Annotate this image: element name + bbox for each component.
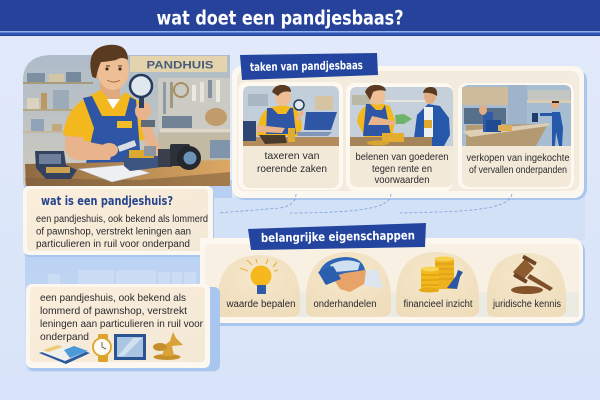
- label: roerende zaken: [257, 163, 327, 175]
- label: belenen van goederen: [356, 151, 449, 163]
- body text: [40, 293, 204, 343]
- shop background: [23, 55, 230, 185]
- icon: magnifying glass: [130, 75, 152, 108]
- icon: gavel: [511, 255, 553, 294]
- body text: een pandjeshuis, ook bekend als lommerd: [36, 214, 208, 225]
- body text: leningen aan particulieren in ruil voor: [40, 319, 204, 330]
- label: [356, 151, 449, 186]
- card: taxeren: [238, 82, 343, 190]
- body text: particulieren in ruil voor onderpand: [36, 239, 190, 250]
- connector panel: light blue band behind left text: [24, 180, 232, 372]
- body text: lommerd of pawnshop, verstrekt: [40, 306, 187, 317]
- icon: watch: [93, 334, 111, 362]
- heading badge: taken van pandjesbaas: [240, 53, 378, 80]
- heading badge: taken van pandjesbaas: taken van pandjesbaas: [250, 58, 363, 74]
- shelves and goods: [23, 72, 230, 163]
- illustration: pawnbroker at counter: [23, 45, 230, 186]
- jewellery box: [35, 151, 77, 179]
- card: verkopen: [458, 83, 574, 189]
- icon: light bulb: [240, 259, 278, 294]
- icon: coin stacks: [419, 256, 463, 292]
- item: juridische kennis: [487, 253, 566, 317]
- man: [63, 45, 161, 163]
- item: onderhandelen: [306, 252, 391, 317]
- sign: [130, 56, 227, 72]
- label: voorwaarden: [374, 174, 430, 186]
- icon: gold balance: [153, 332, 183, 360]
- card: belenen: [346, 83, 453, 191]
- body text: [36, 214, 208, 250]
- body text: onderpand: [40, 332, 89, 343]
- icon: tablet: [114, 334, 146, 360]
- item: onderhandelen: onderhandelen: [314, 299, 376, 310]
- title: wat doet een pandjesbaas?: [156, 6, 404, 30]
- item: juridische kennis: juridische kennis: [492, 299, 561, 310]
- body text: een pandjeshuis, ook bekend als: [40, 293, 186, 304]
- label: [257, 150, 327, 175]
- item: waarde bepalen: waarde bepalen: [226, 299, 296, 310]
- label: tegen rente en: [372, 163, 432, 175]
- dashed connectors: [218, 194, 512, 213]
- label: [466, 152, 570, 176]
- panel: wat is een pandjeshuis: [23, 186, 214, 257]
- label: verkopen van ingekochte: [466, 152, 570, 164]
- label: of vervallen onderpanden: [469, 164, 567, 176]
- icon: handshake: [318, 257, 383, 292]
- scene: taxeren: [243, 85, 339, 146]
- panel: taken van pandjesbaas: [232, 66, 587, 200]
- item: waarde bepalen: [218, 255, 300, 317]
- scene: belenen: [350, 85, 453, 146]
- scene: verkopen: [462, 85, 571, 146]
- heading badge: belangrijke eigenschappen: [248, 223, 426, 250]
- paper: [78, 165, 150, 182]
- item: financieel inzicht: [396, 252, 479, 317]
- counter: [25, 160, 230, 186]
- heading: wat is een pandjeshuis?: [41, 194, 173, 208]
- label: taxeren van: [264, 150, 320, 162]
- faded shelf strip: [48, 270, 196, 284]
- body text: of pawnshop, verstrekt leningen aan: [36, 226, 191, 238]
- item: financieel inzicht: financieel inzicht: [404, 299, 473, 310]
- icon: calculator: [39, 344, 90, 364]
- panel: pandjeshuis met voorwerpen: [26, 284, 220, 371]
- camera: [158, 144, 201, 170]
- sign: PANDHUIS: [146, 60, 214, 72]
- header banner: [0, 0, 600, 36]
- heading badge: belangrijke eigenschappen: belangrijke eigenschappen: [261, 228, 415, 245]
- panel: belangrijke eigenschappen: [200, 238, 585, 326]
- valuables tray: [118, 140, 162, 171]
